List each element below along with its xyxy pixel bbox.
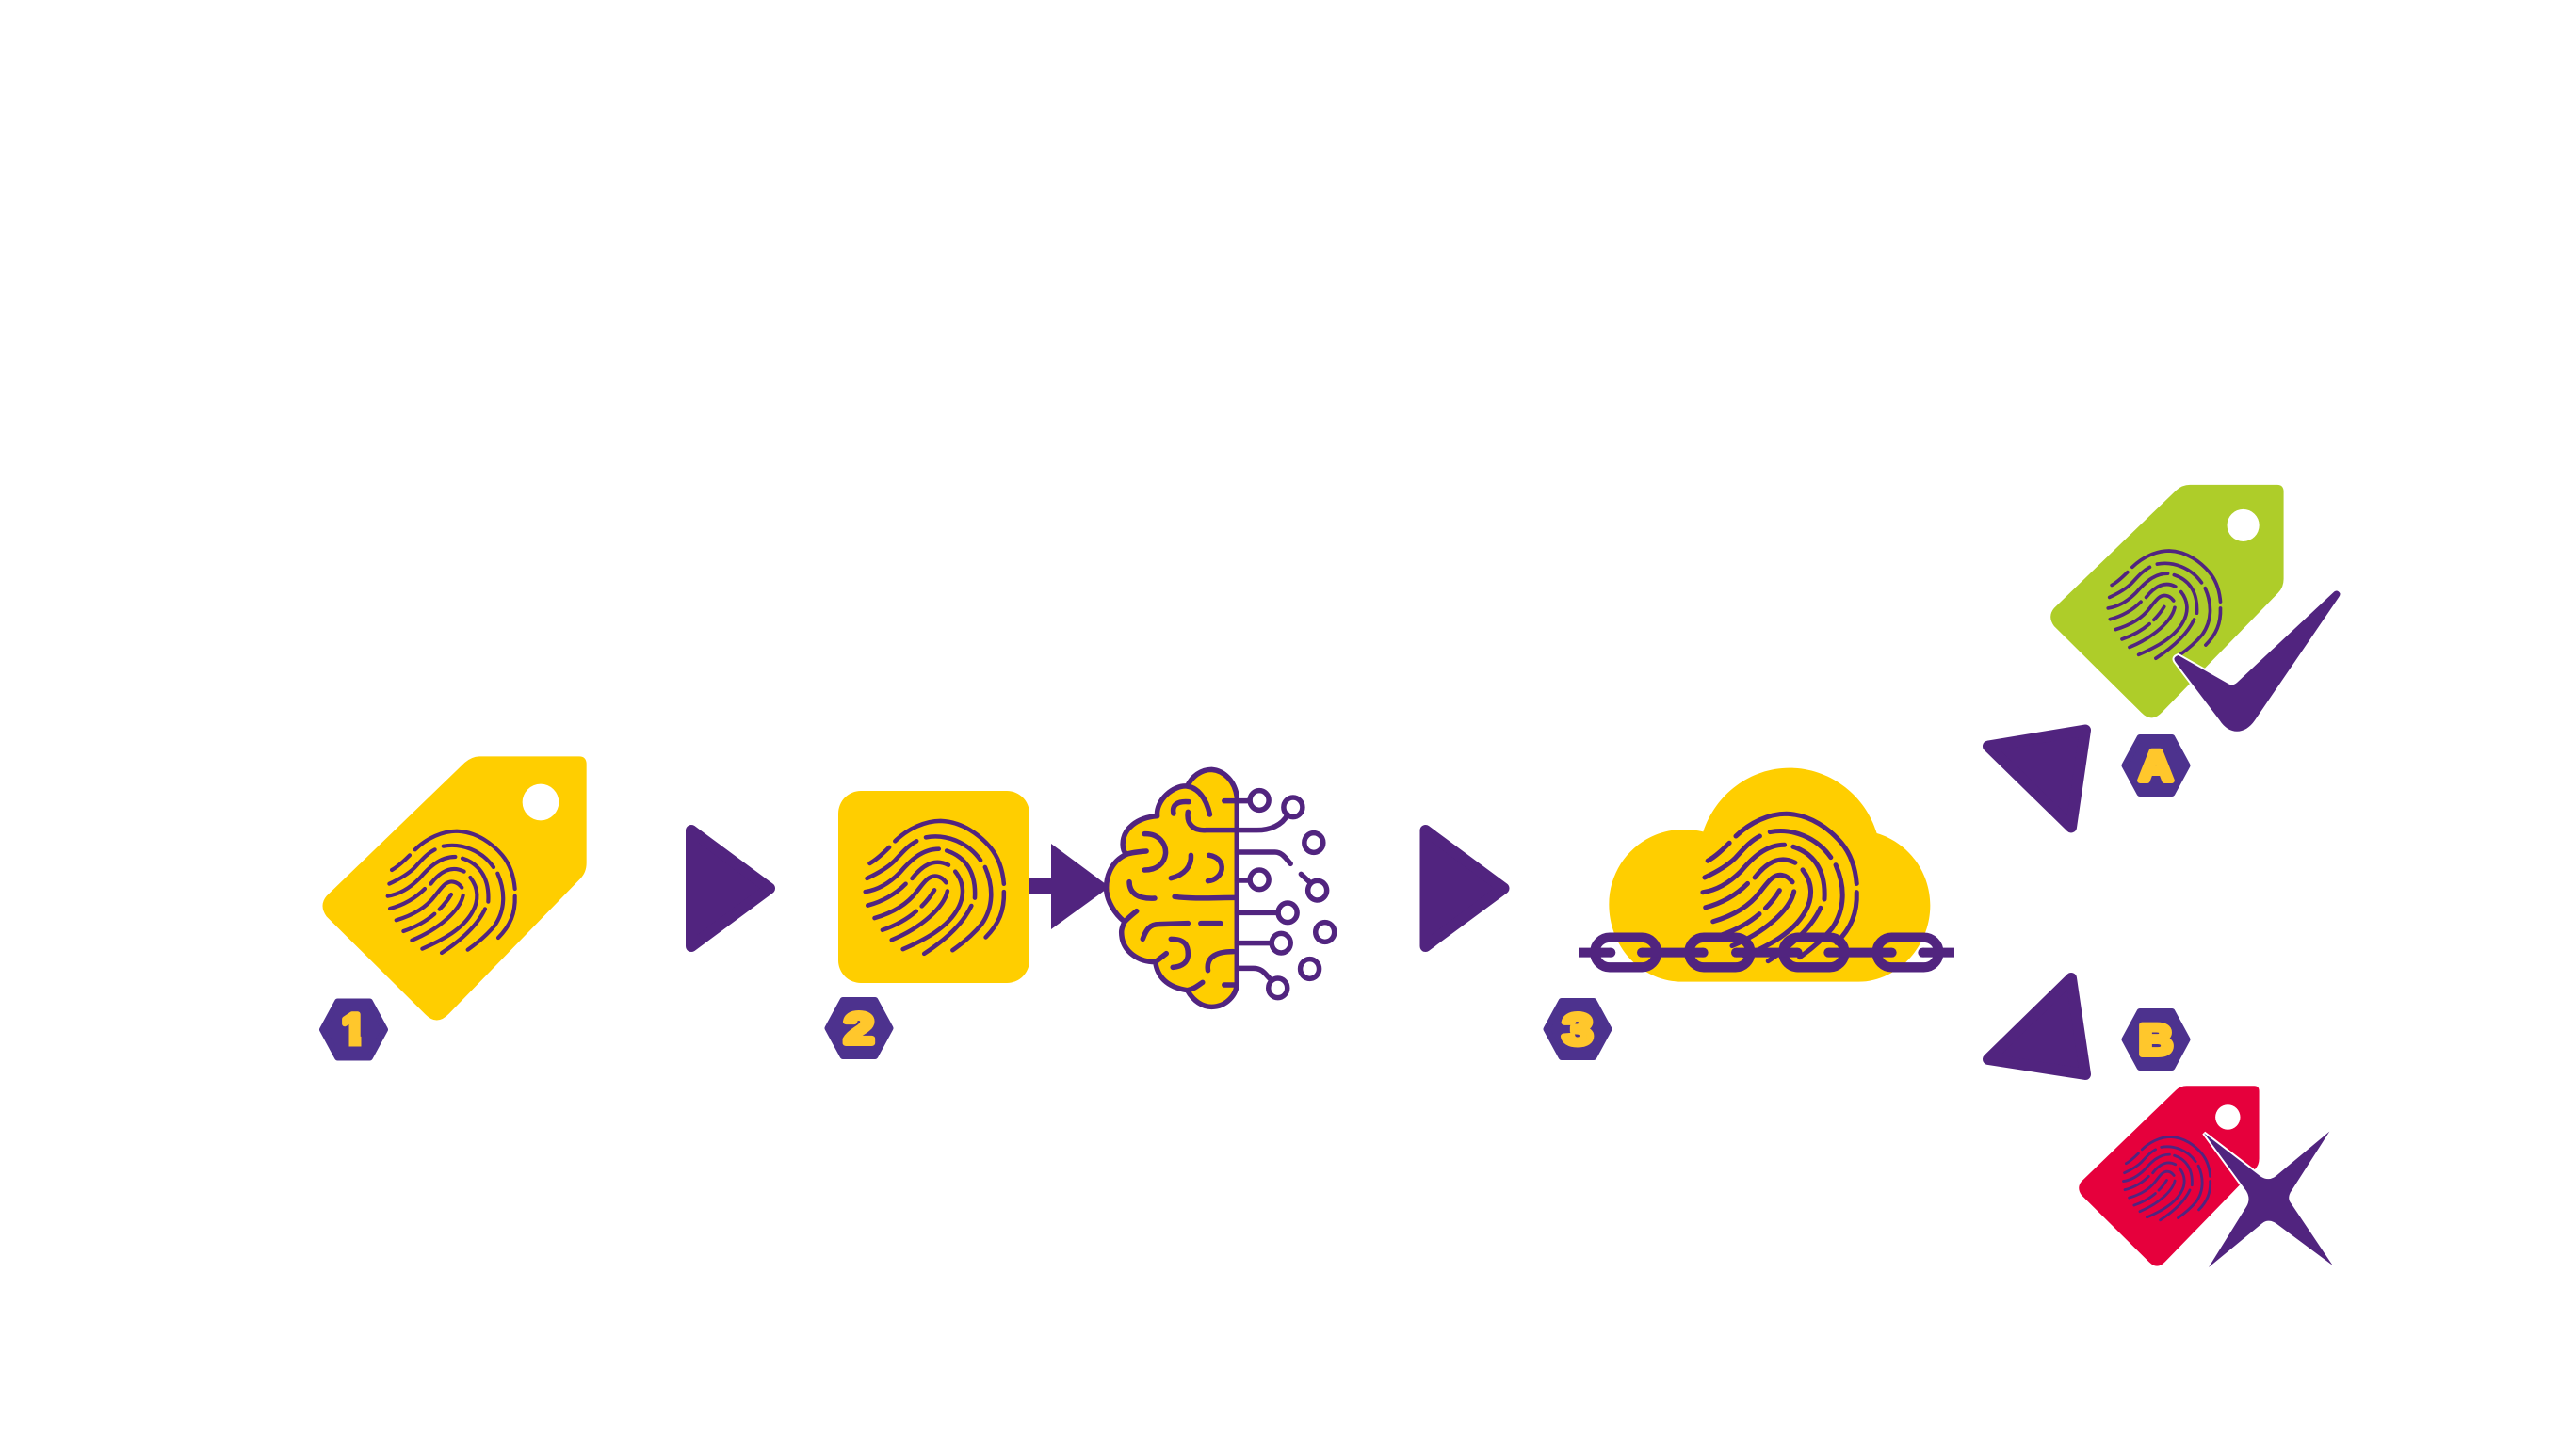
step 1: yellow fingerprint tag: [322, 756, 587, 1021]
fingerprint on cloud: [1703, 814, 1856, 961]
badge 1: 1: [342, 1006, 365, 1053]
icon: half brain half circuit: [1107, 769, 1335, 1007]
arrow: step 1 to step 2: [691, 830, 770, 946]
badge 1: [322, 1002, 384, 1057]
badge B: [2125, 1011, 2187, 1068]
badge 2: 2: [844, 1005, 874, 1053]
icon: cross mark: [2204, 1132, 2333, 1267]
outcome B: red tag: [2079, 1086, 2260, 1266]
arrow: to outcome A: [1988, 731, 2085, 827]
badge 2: [828, 1000, 890, 1056]
badge B: B: [2139, 1017, 2173, 1064]
chain: [1579, 938, 1954, 967]
icon: check mark: [2174, 590, 2341, 732]
step 3: cloud, fingerprint and chain: [1579, 768, 1954, 982]
badge A: [2125, 738, 2187, 793]
badge 3: [1547, 1002, 1609, 1056]
arrow: fingerprint into brain: [1029, 844, 1110, 929]
cloud: [1609, 768, 1930, 982]
outcome A: green tag: [2050, 485, 2284, 717]
badge 3: 3: [1563, 1006, 1593, 1054]
arrow: to outcome B: [1988, 978, 2085, 1074]
step 2: yellow fingerprint square: [838, 791, 1029, 983]
arrow: step 2 to step 3: [1426, 830, 1503, 946]
badge A: A: [2139, 743, 2173, 790]
